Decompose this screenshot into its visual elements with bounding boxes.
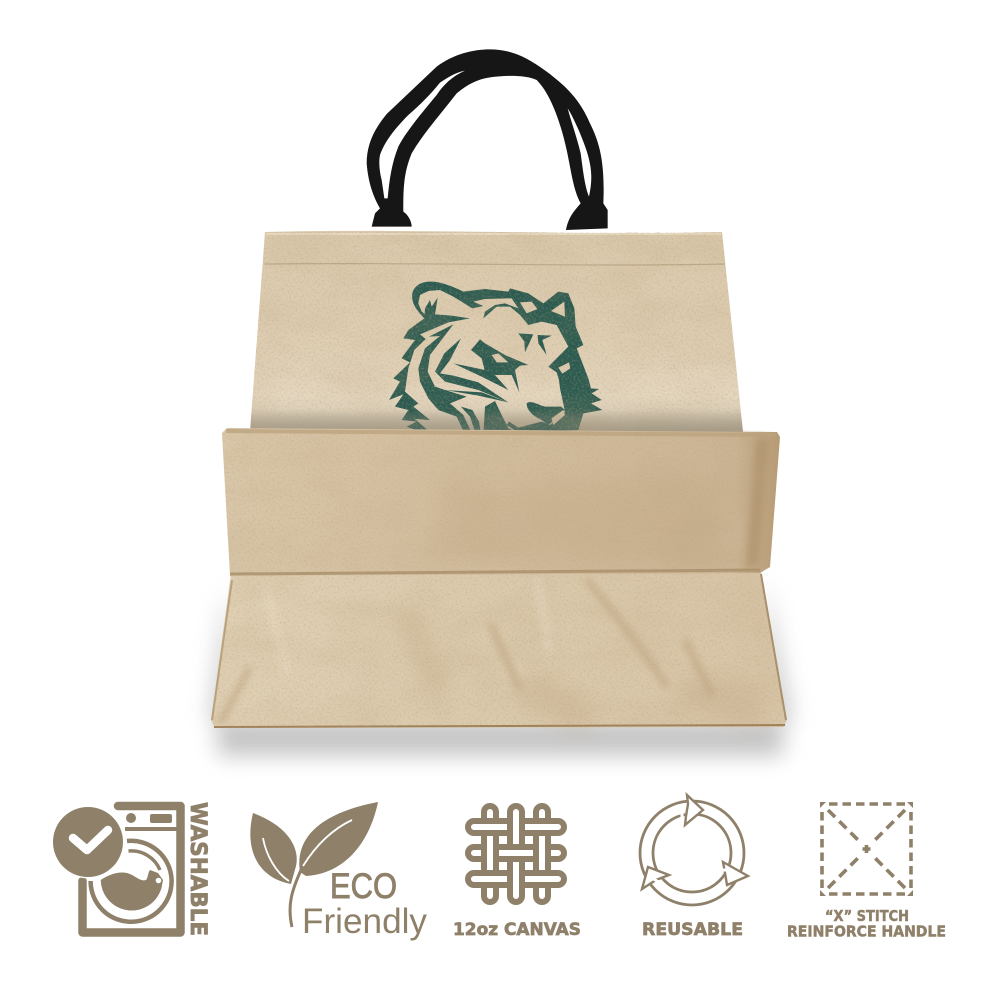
- canvas texture: [205, 228, 795, 733]
- soft shade on back panel: [240, 414, 750, 434]
- feature: x stitch: [787, 802, 946, 940]
- label: reusable: REUSABLE: [642, 920, 743, 939]
- tiger logo: [389, 282, 602, 434]
- back panel of the bag: [250, 231, 743, 432]
- feature: reusable: [640, 795, 748, 939]
- feature: washable: [52, 802, 210, 936]
- handle gap right: [568, 108, 591, 197]
- label: washable: WASHABLE: [185, 802, 210, 936]
- black handles: [367, 49, 608, 230]
- tiger light details: [492, 302, 570, 425]
- feature: eco friendly: [250, 802, 428, 941]
- ground shadow: [208, 580, 794, 756]
- icon: leaves: [250, 802, 378, 927]
- icon: washing machine: [52, 806, 180, 932]
- label: reinforce handle: REINFORCE HANDLE: [787, 922, 946, 940]
- canvas tote bag: [205, 228, 795, 733]
- icon: weave: [468, 806, 564, 902]
- icon: dashed stitch square: [820, 802, 913, 896]
- feature: 12oz canvas: [453, 806, 581, 939]
- lower bottom panel: [211, 566, 787, 728]
- label: friendly: Friendly: [302, 902, 428, 941]
- infographic canvas: [53, 49, 946, 940]
- label: x stitch: “X” STITCH: [825, 907, 909, 925]
- label: 12oz canvas: 12oz CANVAS: [453, 920, 581, 939]
- handle gap left: [379, 71, 465, 198]
- icon: circular arrows: [640, 795, 748, 905]
- label: eco: ECO: [330, 867, 397, 906]
- tiger dark markings: [389, 282, 602, 434]
- icon: check badge: [52, 806, 124, 878]
- folded front panel: [222, 428, 780, 576]
